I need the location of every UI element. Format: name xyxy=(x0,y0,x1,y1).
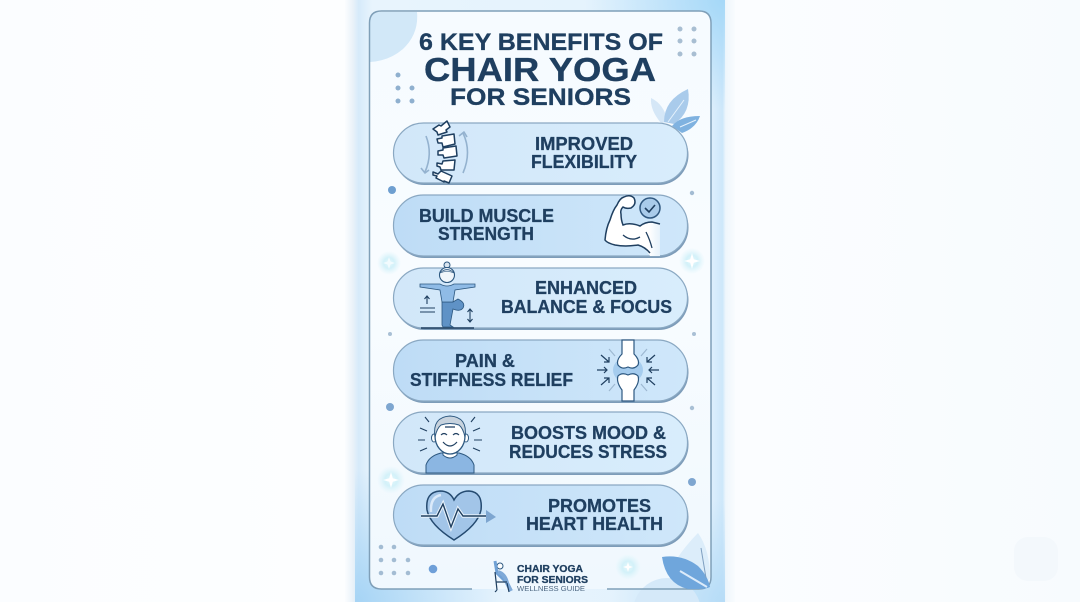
icon: heart with pulse xyxy=(421,491,496,540)
text: footer brand xyxy=(517,564,588,593)
text: promotes heart health xyxy=(526,496,663,534)
icon: knee joint xyxy=(597,340,659,401)
icon: large leaf xyxy=(662,548,710,589)
text: build muscle strength: BUILD MUSCLE xyxy=(419,206,554,226)
text: pain and stiffness relief: STIFFNESS RELIEF xyxy=(410,370,573,390)
panel: pain and stiffness relief xyxy=(394,340,688,403)
icon: flexed arm xyxy=(605,196,660,256)
text: pain and stiffness relief xyxy=(410,351,573,390)
panel: enhanced balance and focus xyxy=(394,262,688,330)
text: promotes heart health: HEART HEALTH xyxy=(526,514,663,534)
framed panel xyxy=(370,11,711,602)
footer logo xyxy=(495,561,588,593)
decorative dots: top right xyxy=(678,26,696,56)
text: boosts mood and reduces stress: REDUCES STRESS xyxy=(509,442,667,462)
title: 6 KEY BENEFITS OF xyxy=(419,29,663,56)
text: promotes heart health: PROMOTES xyxy=(548,496,651,516)
panel: boosts mood and reduces stress xyxy=(394,412,688,475)
icon: smiling senior xyxy=(418,416,482,473)
text: footer brand: FOR SENIORS xyxy=(517,575,588,586)
text: pain and stiffness relief: PAIN & xyxy=(455,351,515,371)
text: build muscle strength: STRENGTH xyxy=(438,224,534,244)
text: build muscle strength xyxy=(419,206,554,244)
title: CHAIR YOGA xyxy=(424,51,656,88)
title xyxy=(419,29,663,111)
centre column background xyxy=(345,0,735,602)
decorative dots: lower left xyxy=(379,545,410,575)
text: enhanced balance and focus: ENHANCED xyxy=(535,278,637,298)
text: boosts mood and reduces stress xyxy=(509,423,667,462)
icon: balancing figure xyxy=(420,262,475,328)
icon: spine xyxy=(421,121,468,183)
sparkles xyxy=(377,248,705,580)
panel: build muscle strength xyxy=(394,195,688,258)
text: enhanced balance and focus: BALANCE & FOCUS xyxy=(501,297,672,317)
text: footer brand: CHAIR YOGA xyxy=(517,564,583,575)
small dots between pills xyxy=(386,186,696,486)
text: improved flexibility: IMPROVED xyxy=(535,134,633,154)
text: boosts mood and reduces stress: BOOSTS MOOD & xyxy=(511,423,666,443)
decorative dots: upper left xyxy=(396,72,414,104)
panel: improved flexibility xyxy=(394,121,688,185)
title: FOR SENIORS xyxy=(450,84,631,111)
icon: leaves xyxy=(651,89,700,133)
text: improved flexibility: FLEXIBILITY xyxy=(531,152,637,172)
icon: seated figure xyxy=(495,561,511,592)
text: improved flexibility xyxy=(531,134,637,172)
accent dot xyxy=(429,565,437,573)
faint corner square xyxy=(1014,537,1058,581)
text: enhanced balance and focus xyxy=(501,278,672,317)
text: footer brand: WELLNESS GUIDE xyxy=(517,586,585,593)
panel: promotes heart health xyxy=(394,485,688,547)
